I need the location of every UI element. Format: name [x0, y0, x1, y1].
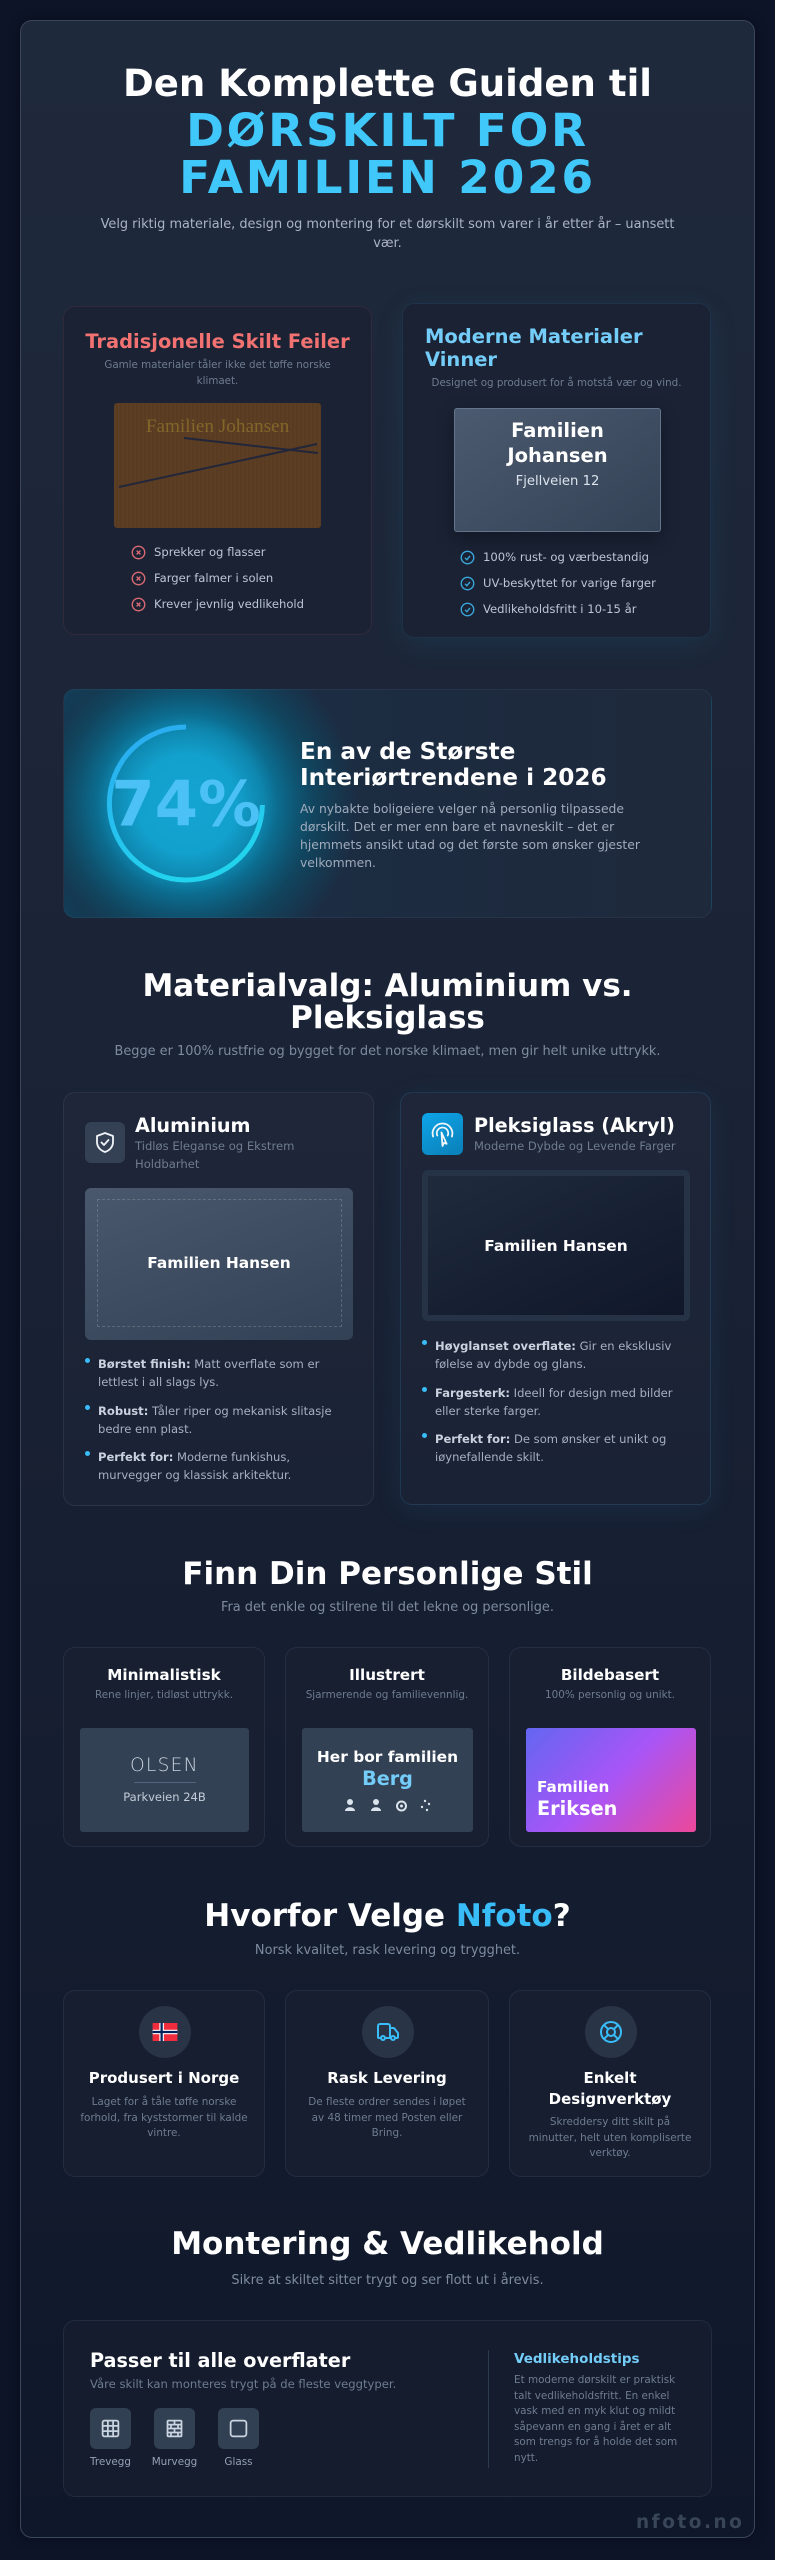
text: material intro: Begge er 100% rustfrie og bygget for det norske klimaet, men gir helt unike uttrykk. — [115, 1044, 660, 1059]
intro text: Velg riktig materiale, design og montering for et dørskilt som varer i år etter år – uansett — [101, 217, 674, 232]
heading: stat — [300, 738, 607, 791]
sign text: address: Parkveien 24B — [123, 1790, 206, 1804]
text: fast delivery: av 48 timer med Posten eller — [312, 2112, 462, 2124]
item: uv protected: UV-beskyttet for varige farger — [483, 576, 656, 590]
sign text: name — [506, 419, 608, 467]
label: brick wall: Murvegg — [152, 2456, 197, 2468]
text: stat description: dørskilt. Det er mer enn bare et navneskilt – det er — [300, 820, 614, 834]
item: fading: Farger falmer i solen — [154, 571, 273, 585]
text: design tool: Skreddersy ditt skilt på — [550, 2116, 670, 2128]
item: colourful: eller sterke farger. — [435, 1404, 541, 1418]
text: style intro: Fra det enkle og stilrene til det lekne og personlige. — [221, 1600, 554, 1615]
sign text: Olsen: OLSEN — [130, 1755, 199, 1776]
text: made in Norway — [80, 2096, 248, 2139]
item: colourful — [422, 1386, 673, 1418]
text: maintenance tips: Et moderne dørskilt er praktisk — [514, 2374, 675, 2386]
sign text: Familien Hansen — [147, 1254, 291, 1272]
heading: illustrated: Illustrert — [349, 1666, 425, 1684]
sign text: address: Fjellveien 12 — [516, 474, 599, 489]
watermark: nfoto.no: nfoto.no — [636, 2512, 744, 2533]
heading: modern — [425, 325, 643, 371]
panel: surfaces and maintenance — [63, 2320, 712, 2497]
text: mounting intro: Sikre at skiltet sitter trygt og ser flott ut i årevis. — [231, 2273, 544, 2288]
panel: photo style — [509, 1647, 711, 1847]
sign: worn wooden sign — [114, 403, 321, 528]
label: wood wall: Trevegg — [90, 2456, 131, 2468]
sign text: name: Familien — [511, 419, 604, 442]
label: glass: Glass — [224, 2456, 253, 2468]
heading: design tool: Enkelt — [584, 2069, 636, 2087]
item: brushed finish — [85, 1357, 320, 1389]
item: cracks: Sprekker og flasser — [154, 545, 266, 559]
icon: truck — [362, 2006, 414, 2058]
text: made in Norway: Laget for å tåle tøffe norske — [92, 2096, 236, 2108]
heading: stat: Interiørtrendene i 2026 — [300, 764, 607, 791]
text: stat description — [300, 802, 640, 870]
item: perfect for: murvegger og klassisk arkitektur. — [98, 1468, 291, 1482]
panel: plexiglass — [400, 1092, 711, 1505]
rule — [134, 1782, 196, 1783]
text: maintenance tips: vask med en myk klut og mildt — [514, 2405, 675, 2417]
text: why intro: Norsk kvalitet, rask levering og trygghet. — [255, 1943, 520, 1958]
text: design tool: verktøy. — [589, 2147, 631, 2159]
divider — [488, 2350, 489, 2468]
item: perfect for — [422, 1432, 666, 1464]
text: design tool: minutter, helt uten kompliserte — [529, 2132, 691, 2144]
heading: design tool: Designverktøy — [549, 2090, 671, 2108]
text: photo note: 100% personlig og unikt. — [545, 1689, 675, 1701]
sign text: Familien Johansen: Familien Johansen — [146, 416, 289, 437]
text: stat description: Av nybakte boligeiere velger nå personlig tilpassede — [300, 802, 624, 816]
sign: illustrated — [302, 1728, 473, 1832]
panel: modern materials win — [402, 303, 711, 638]
sign: modern aluminium sign — [454, 408, 661, 532]
icon: norwegian flag — [139, 2006, 191, 2058]
panel: traditional signs fail — [63, 306, 372, 635]
panel: fast delivery — [285, 1990, 489, 2177]
panel: design tool — [509, 1990, 711, 2177]
icon tile: glass — [218, 2408, 259, 2449]
text: fast delivery — [308, 2096, 466, 2139]
icon: cracks — [118, 437, 318, 488]
text: fast delivery: De fleste ordrer sendes i løpet — [308, 2096, 466, 2108]
intro text: vær. — [373, 236, 402, 250]
heading: modern: Vinner — [425, 348, 497, 371]
title: Den Komplette Guiden til — [123, 62, 652, 105]
item: brushed finish: Børstet finish: Matt overflate som er — [98, 1357, 319, 1371]
text: plexiglass tagline: Moderne Dybde og Levende Farger — [474, 1139, 676, 1153]
heading: surfaces: Passer til alle overflater — [90, 2349, 350, 2372]
list: traditional problems — [132, 545, 304, 612]
list: modern benefits — [460, 550, 656, 616]
heading: mounting: Montering & Vedlikehold — [171, 2226, 604, 2262]
icon: family pictograms — [345, 1799, 430, 1812]
text: maintenance tips — [514, 2374, 677, 2464]
item: rust proof: 100% rust- og værbestandig — [483, 550, 649, 564]
list: plexiglass properties — [422, 1339, 673, 1464]
intro text — [100, 216, 674, 250]
text: maintenance tips: som trengs for å holde det som — [514, 2436, 677, 2448]
item: brushed finish: lettlest i all slags lys. — [98, 1375, 219, 1389]
icon tile: wood wall — [90, 2408, 131, 2449]
heading: modern: Moderne Materialer — [425, 325, 643, 348]
subtitle highlight — [179, 104, 596, 204]
item: perfect for — [85, 1450, 291, 1482]
panel: illustrated style — [285, 1647, 489, 1847]
sign text: family name: Eriksen — [537, 1797, 617, 1820]
text: aluminium tagline — [135, 1139, 294, 1171]
panel: aluminium — [63, 1092, 374, 1506]
text: maintenance tips: nytt. — [514, 2452, 538, 2464]
heading: minimalist: Minimalistisk — [107, 1666, 221, 1684]
text: stat description: velkommen. — [300, 856, 376, 870]
item: robust — [85, 1404, 332, 1436]
heading: material choice — [142, 968, 633, 1036]
text: modern description: Designet og produsert for å motstå vær og vind. — [432, 377, 681, 389]
text: maintenance tips: talt vedlikeholdsfritt. En enkel — [514, 2390, 669, 2402]
item: robust: Robust: Tåler riper og mekanisk slitasje — [98, 1404, 332, 1418]
sign text: family name: Familien — [537, 1778, 609, 1796]
subtitle highlight: FAMILIEN 2026 — [179, 150, 596, 204]
icon: tap — [422, 1113, 463, 1155]
sign: brushed aluminium — [85, 1188, 353, 1340]
sign text: family name — [537, 1778, 617, 1820]
item: maintenance: Krever jevnlig vedlikehold — [154, 597, 304, 611]
text: aluminium tagline: Holdbarhet — [135, 1157, 199, 1171]
heading: style: Finn Din Personlige Stil — [182, 1556, 593, 1592]
heading: maintenance tips: Vedlikeholdstips — [514, 2351, 640, 2367]
item: high gloss: Høyglanset overflate: Gir en eksklusiv — [435, 1339, 671, 1353]
heading: plexiglass: Pleksiglass (Akryl) — [474, 1114, 675, 1137]
item: maintenance free: Vedlikeholdsfritt i 10-15 år — [483, 602, 636, 616]
text: illustrated note: Sjarmerende og familievennlig. — [306, 1689, 468, 1701]
sign: minimalist — [80, 1728, 249, 1832]
sign: glossy plexiglass — [422, 1170, 690, 1321]
sign text: Familien Hansen — [484, 1237, 628, 1255]
item: perfect for: Perfekt for: De som ønsker et unikt og — [435, 1432, 666, 1446]
heading: aluminium: Aluminium — [135, 1114, 251, 1137]
text: traditional description — [104, 358, 331, 387]
icon: shield — [85, 1122, 125, 1163]
item: perfect for: Perfekt for: Moderne funkishus, — [98, 1450, 290, 1464]
item: robust: bedre enn plast. — [98, 1422, 192, 1436]
heading: made in Norway: Produsert i Norge — [89, 2069, 239, 2087]
sign: photo — [526, 1728, 696, 1832]
item: high gloss: følelse av dybde og glans. — [435, 1357, 586, 1371]
heading: material choice: Pleksiglass — [290, 1000, 485, 1036]
text: surfaces: Våre skilt kan monteres trygt på de fleste veggtyper. — [90, 2377, 396, 2391]
text: made in Norway: vintre. — [147, 2127, 181, 2139]
sign text: greeting: Her bor familien — [317, 1748, 458, 1766]
stat number: 74% — [111, 768, 261, 840]
heading: design tool — [549, 2069, 671, 2108]
heading: why nfoto: Hvorfor Velge Nfoto? — [204, 1898, 571, 1934]
text: traditional description: Gamle materialer tåler ikke det tøffe norske — [104, 359, 331, 371]
text: aluminium tagline: Tidløs Eleganse og Ekstrem — [135, 1139, 294, 1153]
icon tile: brick wall — [154, 2408, 195, 2449]
icon: lifebuoy — [585, 2006, 637, 2058]
item: colourful: Fargesterk: Ideell for design med bilder — [435, 1386, 673, 1400]
heading: fast delivery: Rask Levering — [327, 2069, 447, 2087]
heading: traditional: Tradisjonelle Skilt Feiler — [85, 330, 350, 353]
text: minimalist note: Rene linjer, tidløst uttrykk. — [95, 1689, 233, 1701]
sign text: name: Johansen — [507, 444, 608, 467]
panel: 74 percent statistic — [63, 689, 712, 918]
text: stat description: hjemmets ansikt utad og det første som ønsker gjester — [300, 838, 640, 852]
list: aluminium properties — [85, 1357, 332, 1482]
text: fast delivery: Bring. — [372, 2127, 402, 2139]
subtitle highlight: DØRSKILT FOR — [186, 104, 589, 157]
item: perfect for: iøynefallende skilt. — [435, 1450, 544, 1464]
chart: 74% progress ring — [106, 724, 265, 882]
panel: minimalist style — [63, 1647, 265, 1847]
heading: material choice: Materialvalg: Aluminium vs. — [142, 968, 633, 1004]
dashed inset — [97, 1199, 342, 1327]
panel: made in Norway — [63, 1990, 265, 2177]
heading: stat: En av de Største — [300, 738, 515, 765]
text: maintenance tips: såpevann en gang i året er alt — [514, 2420, 671, 2432]
text: made in Norway: forhold, fra kyststormer til kalde — [80, 2112, 248, 2124]
text: traditional description: klimaet. — [197, 375, 238, 387]
text: design tool — [529, 2116, 691, 2159]
heading: photo based: Bildebasert — [561, 1666, 659, 1684]
item: high gloss — [422, 1339, 671, 1371]
sign text: Berg: Berg — [362, 1767, 413, 1790]
